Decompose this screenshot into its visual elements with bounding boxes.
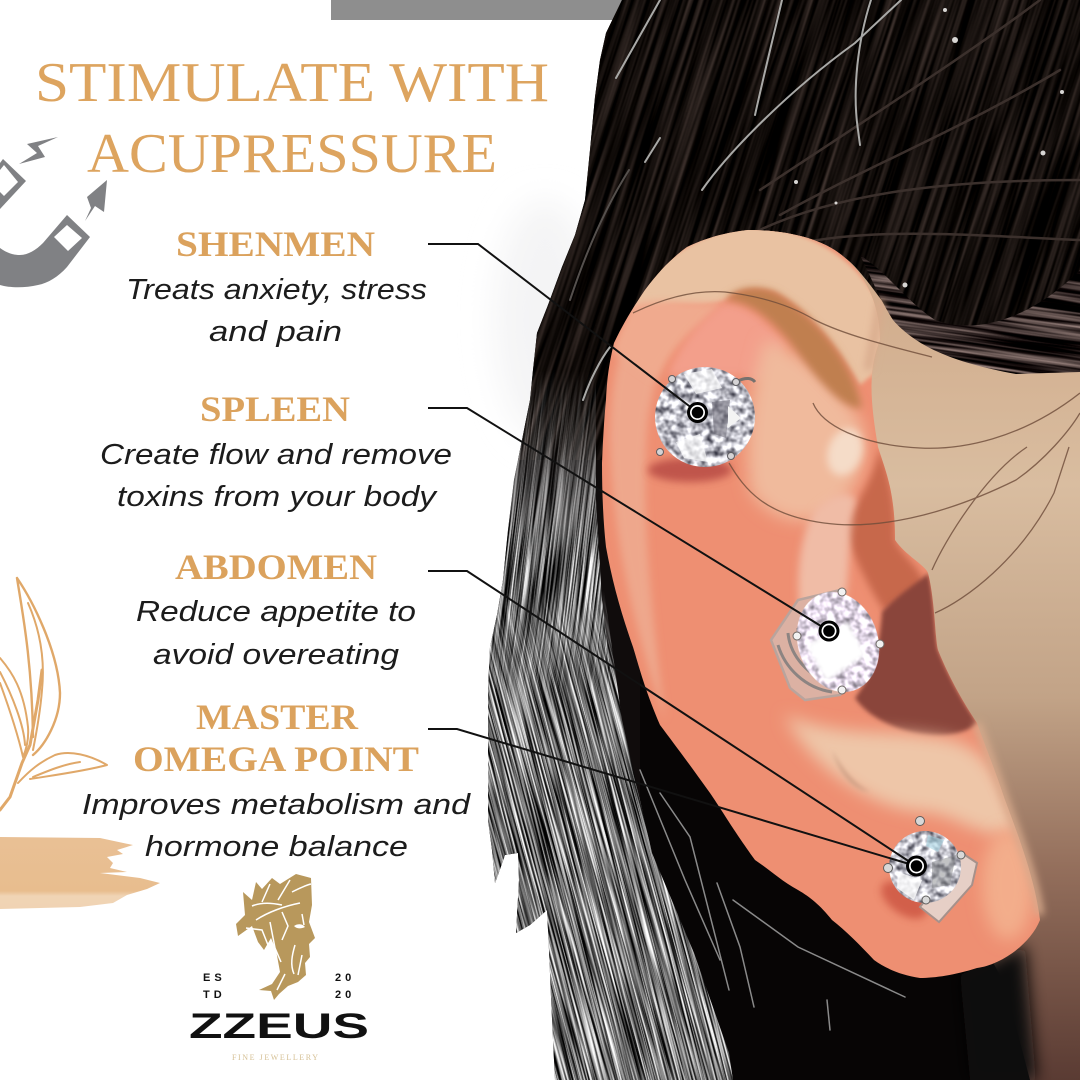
text block: spleen: Create flow and remove — [100, 439, 452, 471]
photo: hair and ear — [480, 0, 1080, 1080]
text block: shenmen — [126, 224, 427, 348]
title: STIMULATE WITH — [35, 52, 549, 114]
text block: spleen: SPLEEN — [200, 389, 350, 429]
brush stroke — [0, 837, 160, 909]
icon: leaf sprig — [0, 578, 107, 810]
text block: master omega point — [82, 697, 471, 863]
text block: master omega point: OMEGA POINT — [133, 739, 419, 779]
marker dots — [687, 402, 927, 876]
tragus cream — [798, 494, 856, 612]
text block: spleen: toxins from your body — [117, 481, 438, 513]
stud 3 — [884, 816, 977, 922]
title: ACUPRESSURE — [87, 123, 497, 185]
fringe of hair over face — [860, 255, 1080, 374]
lobe crease — [834, 758, 866, 791]
text block: abdomen: Reduce appetite to — [136, 596, 416, 628]
face skin — [748, 230, 1080, 1080]
inner pink fossa — [668, 303, 785, 382]
text block: abdomen: avoid overeating — [153, 639, 399, 671]
icon: zeus head — [236, 874, 315, 1000]
lobe cream area — [785, 715, 1020, 834]
leader lines — [428, 244, 916, 866]
logo: zzeus — [189, 874, 369, 1062]
text block: shenmen: and pain — [209, 316, 342, 348]
est 2020: TD — [203, 989, 226, 1001]
text block: shenmen: SHENMEN — [176, 224, 375, 264]
cavity above tragus — [848, 450, 924, 610]
soft blend between ear and face — [868, 300, 1040, 915]
est 2020 — [203, 972, 355, 1001]
helix rim — [608, 356, 663, 704]
upper helix cream — [625, 226, 890, 385]
stud 2 — [771, 581, 892, 703]
est 2020: 20 — [335, 972, 355, 984]
stud 1 — [655, 367, 755, 467]
brown fold band — [725, 288, 862, 408]
shadow under gem 1 — [648, 458, 732, 482]
text block: abdomen — [136, 547, 416, 671]
shadow under gem 3 — [878, 878, 928, 922]
wisps of hair across ear and face — [633, 292, 1080, 613]
top grey bar — [331, 0, 623, 20]
text block: master omega point: Improves metabolism and — [82, 789, 471, 821]
bright antihelix highlight — [824, 426, 867, 478]
wordmark: ZZEUS — [189, 1007, 369, 1046]
hair — [480, 0, 1080, 1080]
ear — [595, 225, 1045, 985]
text block: abdomen: ABDOMEN — [175, 547, 377, 587]
peach under helix — [612, 300, 718, 372]
est 2020: 20 — [335, 989, 355, 1001]
est 2020: ES — [203, 972, 226, 984]
text block: master omega point: MASTER — [196, 697, 359, 737]
title — [35, 52, 549, 185]
neck shadow blend — [960, 945, 1036, 1080]
lobe right peach — [982, 830, 1034, 940]
concha shadow — [855, 573, 977, 735]
text block: master omega point: hormone balance — [145, 831, 408, 863]
icon: horseshoe magnet — [0, 137, 107, 287]
text block: spleen — [100, 389, 452, 513]
tagline: FINE JEWELLERY — [232, 1053, 318, 1062]
outer ear base — [595, 225, 1045, 985]
text block: shenmen: Treats anxiety, stress — [126, 274, 427, 306]
antihelix fold light — [748, 340, 865, 521]
